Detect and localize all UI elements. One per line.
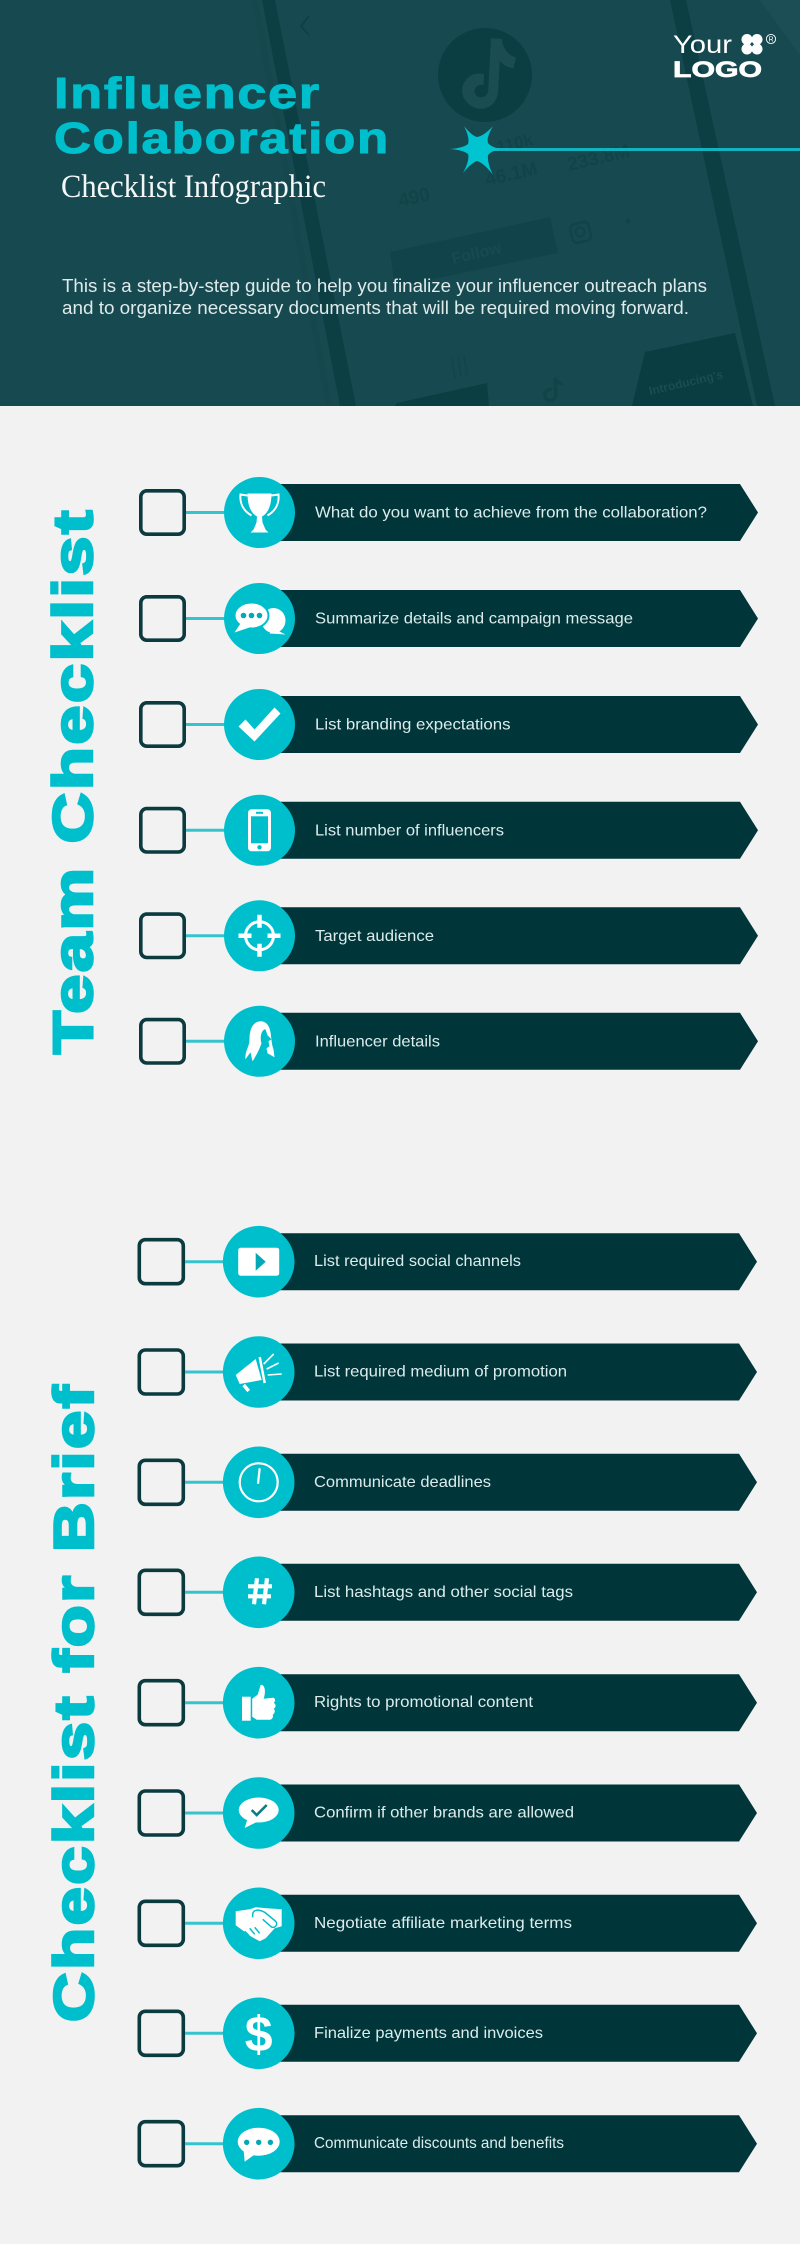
logo: [673, 31, 776, 82]
row: influencer number: [141, 795, 758, 866]
row: hashtags: List hashtags and other social tags: [314, 1584, 573, 1601]
background photo: phone with TikTok profile: [252, 0, 800, 406]
heading: Checklist for Brief: Checklist for Brief: [42, 1383, 105, 2022]
icon: speech bubble with dots: [238, 2128, 280, 2162]
background photo: phone with TikTok profile: 46.1M: [483, 159, 540, 191]
row: target audience: Target audience: [315, 928, 434, 945]
intro text: [62, 276, 707, 318]
icon: trophy: [240, 494, 279, 532]
icon: smartphone: [248, 809, 271, 851]
icon: hashtag: [248, 1578, 272, 1604]
row: branding: List branding expectations: [315, 716, 510, 734]
icon: thumbs up: [242, 1685, 276, 1721]
header panel: [0, 0, 800, 406]
intro text: and to organize necessary documents that will be required moving forward.: [62, 298, 689, 318]
background photo: phone with TikTok profile: Introducing's: [648, 367, 725, 398]
row: discounts: Communicate discounts and benefits: [314, 2135, 564, 2152]
row: social channels: List required social channels: [314, 1253, 521, 1270]
row: influencer number: List number of influencers: [315, 822, 504, 839]
logo: R: [768, 36, 774, 44]
row: payments: [139, 1998, 757, 2069]
row: other brands: Confirm if other brands are allowed: [314, 1804, 574, 1822]
decorative star with line: [450, 126, 800, 175]
title: Influencer Colaboration: [54, 69, 390, 163]
logo: LOGO: [673, 57, 762, 82]
row: summarize: [141, 583, 758, 654]
icon: megaphone: [236, 1354, 282, 1391]
icon: woman profile: [245, 1021, 274, 1061]
row: deadlines: Communicate deadlines: [314, 1474, 491, 1491]
row: rights: Rights to promotional content: [314, 1694, 534, 1711]
row: social channels: [139, 1226, 757, 1298]
row: payments: Finalize payments and invoices: [314, 2025, 543, 2042]
icon: dollar sign: $: [245, 2006, 273, 2062]
row: summarize: Summarize details and campaign message: [315, 610, 633, 628]
row: rights: [139, 1667, 757, 1738]
row: influencer details: [141, 1006, 758, 1077]
background photo: phone with TikTok profile: 233.8M: [565, 141, 632, 176]
panel: Checklist for Brief rows: [139, 1226, 757, 2180]
row: affiliate terms: Negotiate affiliate marketing terms: [314, 1915, 572, 1932]
row: target audience: [141, 900, 758, 971]
row: affiliate terms: [139, 1888, 757, 1959]
subtitle: Checklist Infographic: Checklist Infographic: [61, 169, 326, 205]
title: Influencer Colaboration: Colaboration: [54, 114, 390, 163]
row: hashtags: [139, 1556, 757, 1628]
icon: chat bubbles: [234, 602, 286, 634]
icon: video play: [238, 1248, 279, 1276]
icon: check mark: [238, 708, 280, 742]
row: achieve: [141, 477, 758, 548]
row: branding: [141, 689, 758, 760]
row: influencer details: Influencer details: [315, 1033, 440, 1050]
icon: clock: [240, 1463, 278, 1501]
background photo: phone with TikTok profile: 110k: [495, 130, 535, 157]
icon: speech bubble with check: [239, 1798, 279, 1828]
row: discounts: [139, 2108, 757, 2180]
panel: Team Checklist rows: [141, 477, 758, 1077]
row: achieve: What do you want to achieve from the collaboration?: [315, 504, 707, 522]
row: medium of promotion: [139, 1336, 757, 1408]
icon: target: [238, 915, 280, 957]
logo: Your: [673, 31, 732, 59]
icon: handshake: [236, 1907, 282, 1941]
row: medium of promotion: List required medium of promotion: [314, 1364, 567, 1380]
row: deadlines: [139, 1446, 757, 1518]
heading: Team Checklist: Team Checklist: [41, 508, 104, 1054]
title: Influencer Colaboration: Influencer: [54, 69, 321, 118]
intro text: This is a step-by-step guide to help you finalize your influencer outreach plans: [62, 276, 707, 296]
background photo: phone with TikTok profile: 490: [396, 184, 432, 212]
background photo: phone with TikTok profile: Follow: [450, 240, 504, 268]
row: other brands: [139, 1777, 757, 1849]
